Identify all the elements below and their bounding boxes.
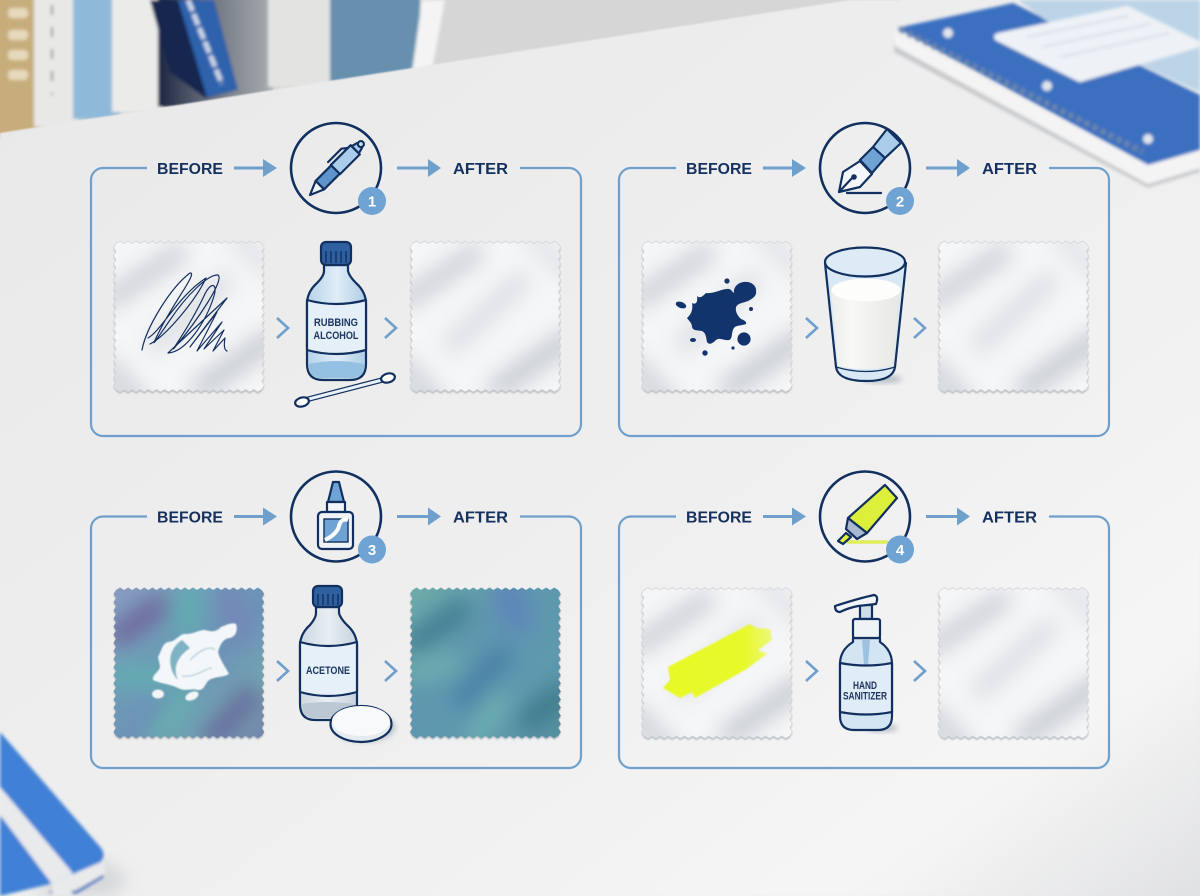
chevron (806, 661, 817, 681)
bottle: hand sanitizer pump (835, 595, 898, 732)
bottle: rubbing alcohol (307, 242, 366, 380)
bottle: rubbing alcohol: RUBBING (314, 317, 358, 329)
chevron (277, 661, 288, 681)
panel 2 header: AFTER (982, 161, 1037, 178)
swatch: pen scribble before (106, 236, 274, 404)
panel 3 header (157, 508, 508, 526)
swatch: glue on coloured fabric before (111, 585, 268, 745)
swatch: clean after (930, 236, 1098, 404)
badge 1: 1 (368, 194, 376, 210)
bottle: rubbing alcohol: ALCOHOL (314, 330, 359, 342)
badge 3: 3 (368, 542, 376, 559)
panel 1 frame (91, 168, 581, 436)
panel 3: glue and acetone (91, 472, 581, 768)
panel 4 header: AFTER (982, 510, 1037, 526)
chevron (914, 318, 925, 338)
bottle: acetone (300, 586, 357, 720)
glass of milk (825, 248, 906, 383)
cotton pad (330, 706, 395, 742)
chevron (385, 318, 396, 338)
swatch: clean after (402, 236, 570, 404)
chevron (385, 661, 396, 681)
cotton swab (294, 372, 396, 408)
panel 3 header: AFTER (453, 510, 508, 526)
icon: ballpoint pen (291, 123, 381, 213)
chevron (277, 318, 288, 338)
swatch: highlighter streak before (634, 582, 802, 750)
panel 4 frame (619, 516, 1109, 768)
panel 2 header (686, 159, 1037, 178)
bottle: hand sanitizer pump: SANITIZER (843, 690, 887, 702)
icon: fountain pen (820, 123, 910, 213)
notebook, bottom left (0, 732, 130, 896)
badge 4: 4 (896, 542, 905, 559)
bottle: hand sanitizer pump: HAND (853, 680, 877, 692)
panel 3 frame (91, 516, 581, 768)
swatch: clean coloured fabric after (408, 585, 568, 745)
panel 1: ballpoint pen and rubbing alcohol (91, 123, 581, 436)
panel 2 header: BEFORE (686, 161, 752, 178)
icon: glue bottle (291, 472, 381, 562)
bottle: acetone: ACETONE (306, 665, 350, 677)
panel 1 header: AFTER (453, 161, 508, 178)
badge 2 (886, 187, 914, 215)
panel 2: fountain pen and milk (619, 123, 1109, 436)
swatch: clean after (930, 582, 1098, 750)
spiral notebook, top right (894, 0, 1200, 188)
badge 4 (886, 536, 914, 564)
panel 1 header (157, 159, 508, 178)
blurred bookshelf and chair behind the desk (0, 0, 900, 140)
badge 1 (358, 187, 386, 215)
swatch: ink splat before (634, 236, 802, 404)
chevron (806, 318, 817, 338)
panel 4 header (686, 508, 1037, 526)
panel 4: highlighter and hand sanitizer (619, 472, 1109, 768)
panel 4 header: BEFORE (686, 510, 752, 526)
badge 3 (358, 536, 386, 564)
panel 2 frame (619, 168, 1109, 436)
panel 3 header: BEFORE (157, 510, 223, 526)
badge 2: 2 (896, 194, 904, 210)
panel 1 header: BEFORE (157, 161, 223, 178)
icon: highlighter (820, 472, 910, 562)
chevron (914, 661, 925, 681)
